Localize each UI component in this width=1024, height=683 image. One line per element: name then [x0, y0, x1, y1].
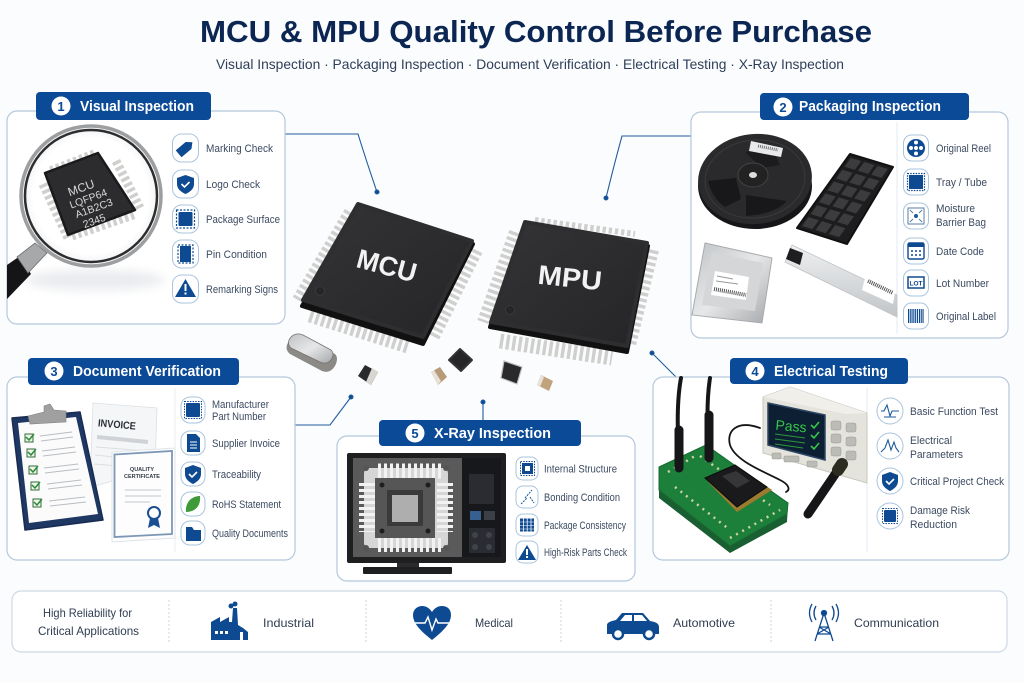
header: document verification: 3	[50, 364, 58, 379]
quality certificate: QUALITY	[130, 467, 154, 473]
panel: x-ray inspection	[337, 420, 635, 581]
central chips	[286, 204, 653, 391]
invoice document	[90, 403, 157, 487]
label: automotive: Automotive	[673, 616, 735, 630]
checklist: visual inspection: Logo Check	[206, 179, 261, 191]
icon: communication tower	[810, 604, 838, 641]
label: communication: Communication	[854, 616, 939, 630]
checklist: document verification	[181, 397, 288, 545]
checklist: x-ray inspection: Package Consistency	[544, 520, 626, 532]
icon: factory	[211, 602, 248, 640]
header: document verification: Document Verification	[73, 364, 221, 380]
header: document verification	[28, 358, 239, 385]
checklist: visual inspection: Marking Check	[206, 143, 274, 155]
quality certificate: CERTIFICATE	[124, 474, 160, 480]
magnifier illustration: MCU	[66, 177, 96, 199]
x-ray monitor	[347, 453, 506, 574]
clipboard	[12, 404, 103, 530]
checklist: document verification: Traceability	[212, 469, 262, 481]
invoice document: INVOICE	[97, 417, 136, 433]
checklist: packaging inspection: Lot Number	[936, 278, 989, 290]
small components	[286, 334, 553, 391]
header: visual inspection: 1	[57, 99, 65, 114]
magnifier illustration: A1B2C3	[74, 196, 115, 221]
title: MCU & MPU Quality Control Before Purchase	[200, 14, 872, 49]
tester device	[763, 387, 867, 483]
reel	[694, 128, 816, 230]
magnifier illustration: LQFP64	[68, 187, 109, 211]
panel: electrical testing	[653, 358, 1009, 560]
MPU chip	[483, 220, 653, 358]
checklist: x-ray inspection: Internal Structure	[544, 464, 617, 476]
checklist: document verification: Quality Documents	[212, 528, 288, 540]
header: x-ray inspection: X-Ray Inspection	[434, 426, 551, 442]
quality certificate	[112, 448, 175, 542]
MCU chip: MCU	[353, 244, 420, 288]
checklist: electrical testing: Electrical	[910, 435, 952, 447]
checklist: packaging inspection: Moisture	[936, 203, 975, 215]
checklist: packaging inspection: Date Code	[936, 246, 984, 258]
checklist: visual inspection: Remarking Signs	[206, 284, 279, 296]
header: x-ray inspection	[379, 420, 581, 446]
cables and probe	[678, 378, 842, 514]
connector lines	[285, 134, 691, 425]
checklist: document verification: Manufacturer	[212, 399, 269, 411]
strip heading: High Reliability for	[43, 606, 132, 620]
checklist: electrical testing	[877, 398, 1005, 531]
checklist: electrical testing: Basic Function Test	[910, 406, 998, 418]
strip heading: Critical Applications	[38, 624, 139, 638]
header: electrical testing: 4	[751, 364, 759, 379]
panel: visual inspection	[7, 92, 285, 324]
panel: packaging inspection	[691, 93, 1008, 338]
test board	[659, 445, 788, 553]
checklist: visual inspection: Pin Condition	[206, 249, 267, 261]
tester device: Pass	[775, 417, 807, 435]
subtitle: Visual Inspection · Packaging Inspection · Document Verification · Electrical Testing · X-Ray Inspection	[216, 56, 844, 72]
icon: medical heart	[413, 606, 451, 640]
checklist: packaging inspection: Original Label	[936, 311, 996, 323]
icon: car	[607, 613, 659, 639]
header: packaging inspection: 2	[779, 100, 787, 115]
magnifier illustration: 2345	[81, 212, 108, 231]
checklist: packaging inspection: Barrier Bag	[936, 217, 986, 229]
tube	[785, 245, 897, 317]
checklist: electrical testing: Damage Risk	[910, 505, 971, 517]
checklist: packaging inspection: LOT	[910, 280, 923, 288]
checklist: packaging inspection: Original Reel	[936, 143, 991, 155]
moisture barrier bag	[692, 243, 772, 323]
label: medical: Medical	[475, 616, 513, 630]
label: industrial: Industrial	[263, 616, 314, 630]
checklist: electrical testing: Critical Project Check	[910, 476, 1005, 488]
checklist: x-ray inspection: Bonding Condition	[544, 492, 620, 504]
magnifier illustration	[7, 126, 165, 299]
header: x-ray inspection: 5	[411, 426, 419, 441]
checklist: x-ray inspection	[516, 457, 627, 563]
checklist: document verification: Part Number	[212, 411, 266, 423]
header: packaging inspection: Packaging Inspection	[799, 99, 941, 115]
checklist: packaging inspection	[904, 135, 996, 329]
checklist: visual inspection: Package Surface	[206, 214, 280, 226]
header: electrical testing: Electrical Testing	[774, 364, 888, 380]
header: electrical testing	[730, 358, 908, 384]
checklist: x-ray inspection: High-Risk Parts Check	[544, 547, 627, 559]
panel: applications strip	[12, 591, 1007, 652]
checklist: electrical testing: Reduction	[910, 519, 957, 531]
tray	[797, 154, 893, 244]
MPU chip: MPU	[537, 260, 603, 296]
panel: document verification	[7, 358, 295, 560]
checklist: electrical testing: Parameters	[910, 449, 964, 461]
checklist: document verification: Supplier Invoice	[212, 438, 280, 450]
header: visual inspection	[36, 92, 211, 120]
MCU chip	[298, 204, 476, 346]
header: visual inspection: Visual Inspection	[80, 99, 194, 115]
header: packaging inspection	[760, 93, 969, 120]
checklist: packaging inspection: Tray / Tube	[936, 177, 987, 189]
checklist: visual inspection	[172, 134, 280, 303]
strip heading	[38, 606, 139, 638]
checklist: document verification: RoHS Statement	[212, 499, 281, 511]
